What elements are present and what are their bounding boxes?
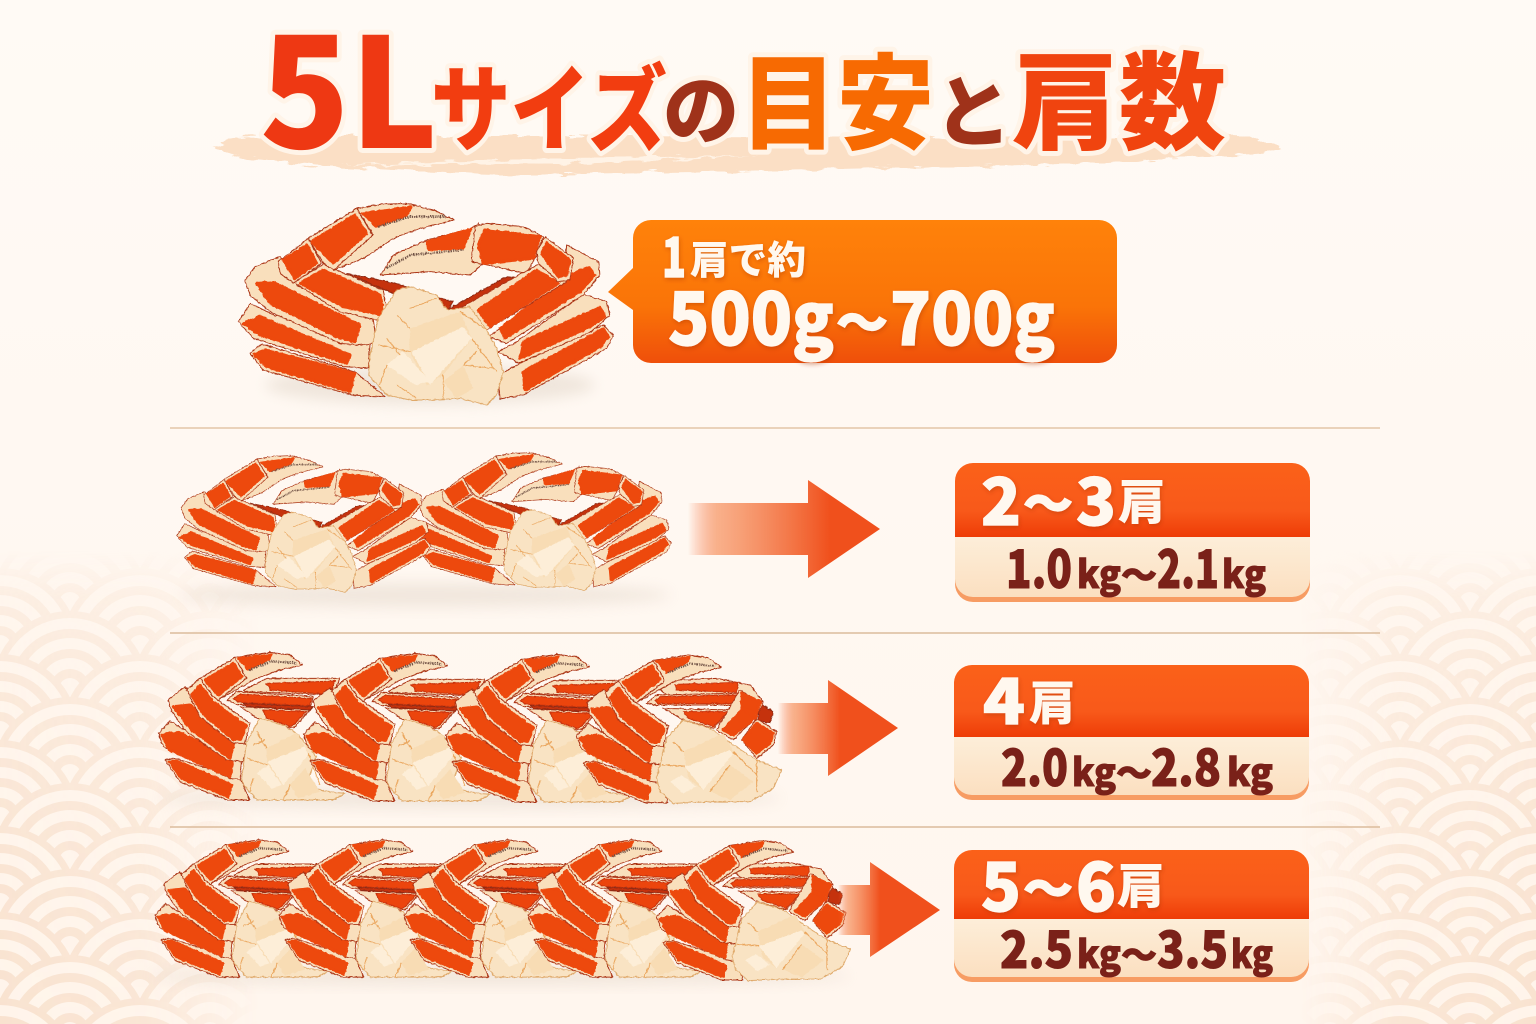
card weight: 〜 (1116, 745, 1152, 797)
card weight: kg (1072, 742, 1116, 797)
card count (981, 835, 1165, 931)
card weight: 〜 (1121, 547, 1157, 599)
background wave pattern (0, 550, 1536, 1024)
card weight: kg (1077, 924, 1121, 979)
card weight (1000, 911, 1273, 983)
title: 目安: 目安 (740, 20, 934, 171)
card count: 〜 (1023, 465, 1073, 537)
card count: 5 (981, 835, 1021, 931)
card weight (1006, 528, 1266, 603)
result card: 2〜3肩 (955, 452, 1310, 603)
card count: 肩 (1029, 665, 1076, 734)
card weight: kg (1227, 742, 1273, 797)
card count: 4 (983, 652, 1025, 742)
card count (983, 652, 1076, 742)
callout value (668, 261, 1055, 366)
card weight: 1.0 (1006, 528, 1072, 603)
callout value: 700g (890, 261, 1055, 366)
arrow: row 2 (688, 480, 880, 578)
result card: 5〜6肩 (954, 835, 1309, 983)
title: 肩数: 肩数 (1012, 18, 1226, 172)
callout value: 500g (668, 261, 834, 366)
title (260, 0, 1226, 192)
card count: 6 (1076, 835, 1116, 931)
card count: 〜 (1023, 850, 1073, 922)
arrow: row 3 (778, 680, 898, 776)
card weight: kg (1077, 544, 1121, 599)
title: と: と (934, 51, 1012, 163)
title underline brush stroke (214, 136, 1282, 175)
card weight: 2.5 (1000, 911, 1073, 983)
card weight: kg (1231, 924, 1273, 979)
divider (170, 632, 1380, 634)
row 3 crabs: four crabs (158, 652, 782, 808)
callout: weight of one crab: 肩で約 (690, 230, 806, 286)
divider (170, 826, 1380, 828)
card weight (1001, 729, 1273, 801)
card count: 3 (1076, 452, 1116, 544)
result card: 4肩 (954, 652, 1309, 801)
card count: 肩 (1117, 847, 1165, 917)
divider (170, 427, 1380, 429)
card weight: 2.1 (1157, 528, 1219, 603)
card weight: 〜 (1121, 927, 1157, 979)
title: サイズ: サイズ (431, 35, 667, 171)
card weight: 3.5 (1157, 911, 1228, 983)
card weight: 2.0 (1001, 729, 1068, 801)
callout: weight of one crab (608, 214, 1117, 366)
row 4 crabs: five crabs (150, 840, 850, 985)
arrow: row 4 (838, 862, 940, 957)
callout value: 〜 (836, 282, 888, 357)
title: の: の (663, 50, 739, 160)
card count: 肩 (1118, 463, 1166, 533)
row 1 crab (238, 203, 613, 405)
card weight: 2.8 (1151, 729, 1221, 801)
callout label: 1 (662, 214, 686, 293)
card weight: kg (1222, 544, 1266, 599)
card count: 2 (981, 452, 1021, 544)
row 2 crabs: two crabs (177, 453, 671, 607)
card count (981, 452, 1166, 544)
